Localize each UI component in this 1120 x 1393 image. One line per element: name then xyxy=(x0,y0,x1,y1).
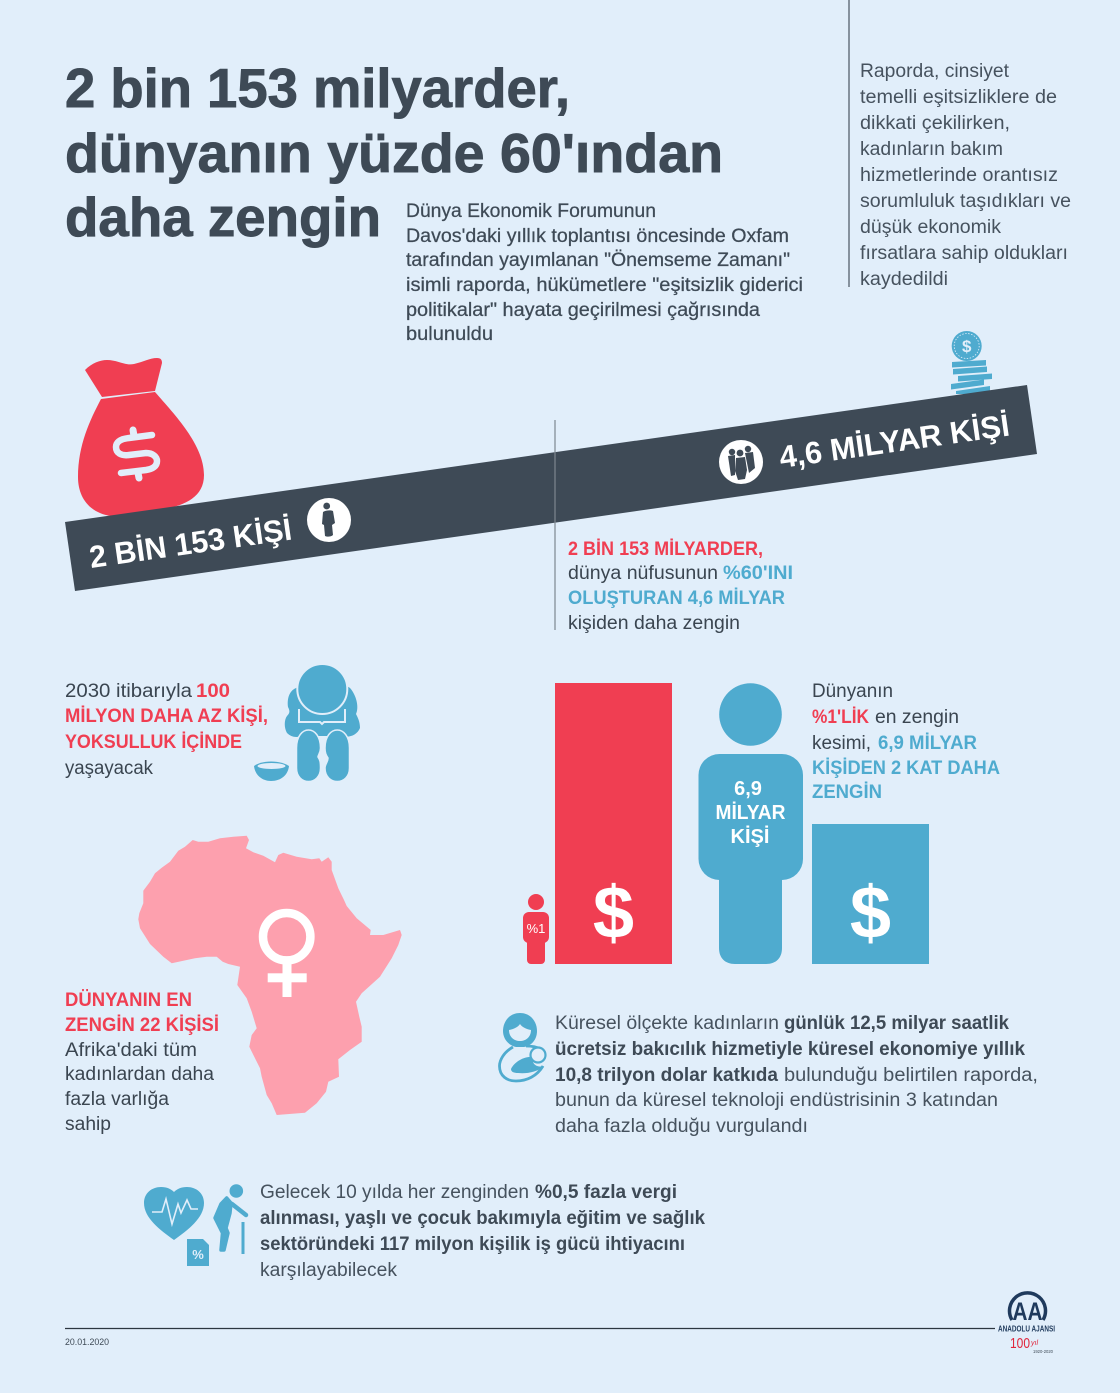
bar: top 1 percent wealth xyxy=(555,683,672,964)
callout: billionaires vs 4.6 billion: kişiden daha zengin xyxy=(568,613,740,634)
text: richest 22 people: kadınlardan daha xyxy=(65,1064,214,1085)
side note text block: temelli eşitsizliklere de xyxy=(860,87,1057,108)
icon: small person 1 percent xyxy=(523,894,549,964)
callout: billionaires vs 4.6 billion: OLUŞTURAN 4,6 MİLYAR xyxy=(568,588,785,609)
text: richest one percent: en zengin xyxy=(875,707,959,728)
side note text block: düşük ekonomik xyxy=(860,217,1002,238)
bar: 6.9 billion wealth xyxy=(812,824,929,964)
text: richest one percent: 6,9 MİLYAR xyxy=(878,733,977,754)
text: richest 22 people: sahip xyxy=(65,1114,111,1135)
text: richest one percent xyxy=(812,681,1000,803)
side note text block: sorumluluk taşıdıkları ve xyxy=(860,191,1071,212)
logo: anadolu ajansi: 1920-2020 xyxy=(1033,1349,1053,1354)
text: poverty 2030: YOKSULLUK İÇİNDE xyxy=(65,732,242,753)
text: poverty 2030 xyxy=(65,681,268,779)
bar: 6.9 billion wealth: $ xyxy=(850,871,891,954)
icon: heart with pulse xyxy=(144,1187,204,1240)
text: women's unpaid care work: 10,8 trilyon dolar katkıda xyxy=(555,1065,778,1086)
text: women's unpaid care work: ücretsiz bakıcılık hizmetiyle küresel ekonomiye yıllık xyxy=(555,1039,1025,1060)
text: wealth tax: sektöründeki 117 milyon kişilik iş gücü ihtiyacını xyxy=(260,1234,685,1255)
text: richest one percent: ZENGİN xyxy=(812,782,882,803)
text: wealth tax: karşılayabilecek xyxy=(260,1260,398,1281)
logo: anadolu ajansi: ANADOLU AJANSI xyxy=(998,1324,1055,1334)
icon: coin stack xyxy=(951,331,992,394)
logo: anadolu ajansi xyxy=(998,1293,1055,1354)
icon: small person 1 percent: %1 xyxy=(527,921,545,936)
intro text block: isimli raporda, hükümetlere "eşitsizlik giderici xyxy=(406,275,803,296)
logo: anadolu ajansi: yıl xyxy=(1030,1340,1038,1347)
callout: billionaires vs 4.6 billion: 2 BİN 153 MİLYARDER, xyxy=(568,539,763,560)
icon: group of people xyxy=(719,440,763,484)
bar label: 2 bin 153 kişi: 2 BİN 153 KİŞİ xyxy=(87,512,294,575)
side note text block: fırsatlara sahip oldukları xyxy=(860,243,1068,264)
icon: seated poor person with bowl xyxy=(254,664,360,782)
side note text block: dikkati çekilirken, xyxy=(860,113,1010,134)
logo: anadolu ajansi: AA xyxy=(1012,1298,1042,1326)
intro text block: Davos'daki yıllık toplantısı öncesinde Oxfam xyxy=(406,226,789,247)
icon: money bag xyxy=(78,358,204,516)
icon: percent document: % xyxy=(192,1247,204,1262)
logo: anadolu ajansi: 100 xyxy=(1010,1335,1030,1352)
text: women's unpaid care work: Küresel ölçekte kadınların xyxy=(555,1013,779,1034)
callout: billionaires vs 4.6 billion: dünya nüfusunun xyxy=(568,563,718,584)
text: women's unpaid care work: günlük 12,5 milyar saatlik xyxy=(784,1013,1009,1034)
icon: large person 6.9 billion: KİŞİ xyxy=(731,825,769,848)
title: dünyanın yüzde 60'ından xyxy=(65,122,723,184)
title xyxy=(65,57,723,248)
side note text block: Raporda, cinsiyet xyxy=(860,61,1010,82)
text: wealth tax: alınması, yaşlı ve çocuk bakımıyla eğitim ve sağlık xyxy=(260,1208,705,1229)
text: wealth tax: Gelecek 10 yılda her zenginden xyxy=(260,1182,529,1203)
text: richest 22 people: DÜNYANIN EN xyxy=(65,990,192,1011)
bar: top 1 percent wealth: $ xyxy=(593,871,634,954)
text: richest 22 people: fazla varlığa xyxy=(65,1089,169,1110)
text: poverty 2030: 100 xyxy=(196,681,230,702)
callout: billionaires vs 4.6 billion: %60'INI xyxy=(723,563,793,584)
side note text block xyxy=(860,61,1071,290)
text: women's unpaid care work: bulunduğu belirtilen raporda, xyxy=(784,1065,1038,1086)
callout: billionaires vs 4.6 billion xyxy=(568,539,793,634)
icon: large person 6.9 billion: MİLYAR xyxy=(716,801,786,824)
text: poverty 2030: yaşayacak xyxy=(65,758,153,779)
intro text block: bulunuldu xyxy=(406,324,493,345)
side note text block: hizmetlerinde orantısız xyxy=(860,165,1058,186)
map: africa with female symbol xyxy=(138,836,402,1115)
intro text block xyxy=(406,201,803,345)
icon: coin stack: $ xyxy=(962,337,972,356)
title: 2 bin 153 milyarder, xyxy=(65,57,570,119)
intro text block: politikalar" hayata geçirilmesi çağrısında xyxy=(406,300,760,321)
text: richest one percent: Dünyanın xyxy=(812,681,893,702)
title: daha zengin xyxy=(65,186,381,248)
chart: wealth comparison xyxy=(523,683,929,964)
icon: single person xyxy=(307,498,351,542)
date: 20.01.2020 xyxy=(65,1337,109,1348)
icon: female symbol xyxy=(263,913,310,997)
text: wealth tax xyxy=(260,1182,705,1281)
text: richest 22 people: ZENGİN 22 KİŞİSİ xyxy=(65,1015,219,1036)
seesaw bar xyxy=(65,385,1037,591)
icon: heart, document and elderly person xyxy=(144,1184,246,1266)
icon: large person 6.9 billion xyxy=(698,683,803,964)
icon: mother and baby xyxy=(500,1013,546,1081)
text: poverty 2030: MİLYON DAHA AZ KİŞİ, xyxy=(65,706,268,727)
bar label: 4,6 milyar kişi: 4,6 MİLYAR KİŞİ xyxy=(777,408,1012,475)
text: richest 22 people: Afrika'daki tüm xyxy=(65,1040,197,1061)
intro text block: Dünya Ekonomik Forumunun xyxy=(406,201,656,222)
icon: large person 6.9 billion: 6,9 xyxy=(734,778,762,800)
text: women's unpaid care work: daha fazla olduğu vurgulandı xyxy=(555,1116,808,1137)
side note text block: kaydedildi xyxy=(860,269,948,290)
text: women's unpaid care work xyxy=(555,1013,1038,1137)
side note text block: kadınların bakım xyxy=(860,139,1003,160)
text: wealth tax: %0,5 fazla vergi xyxy=(535,1182,677,1203)
text: poverty 2030: 2030 itibarıyla xyxy=(65,681,192,702)
text: richest 22 people xyxy=(65,990,219,1135)
text: women's unpaid care work: bunun da küresel teknoloji endüstrisinin 3 katından xyxy=(555,1090,998,1111)
intro text block: tarafından yayımlanan "Önemseme Zamanı" xyxy=(406,250,790,271)
text: richest one percent: %1'LİK xyxy=(812,707,869,728)
icon: elderly person with cane xyxy=(215,1184,246,1254)
text: richest one percent: KİŞİDEN 2 KAT DAHA xyxy=(812,758,1000,779)
text: richest one percent: kesimi, xyxy=(812,733,871,754)
